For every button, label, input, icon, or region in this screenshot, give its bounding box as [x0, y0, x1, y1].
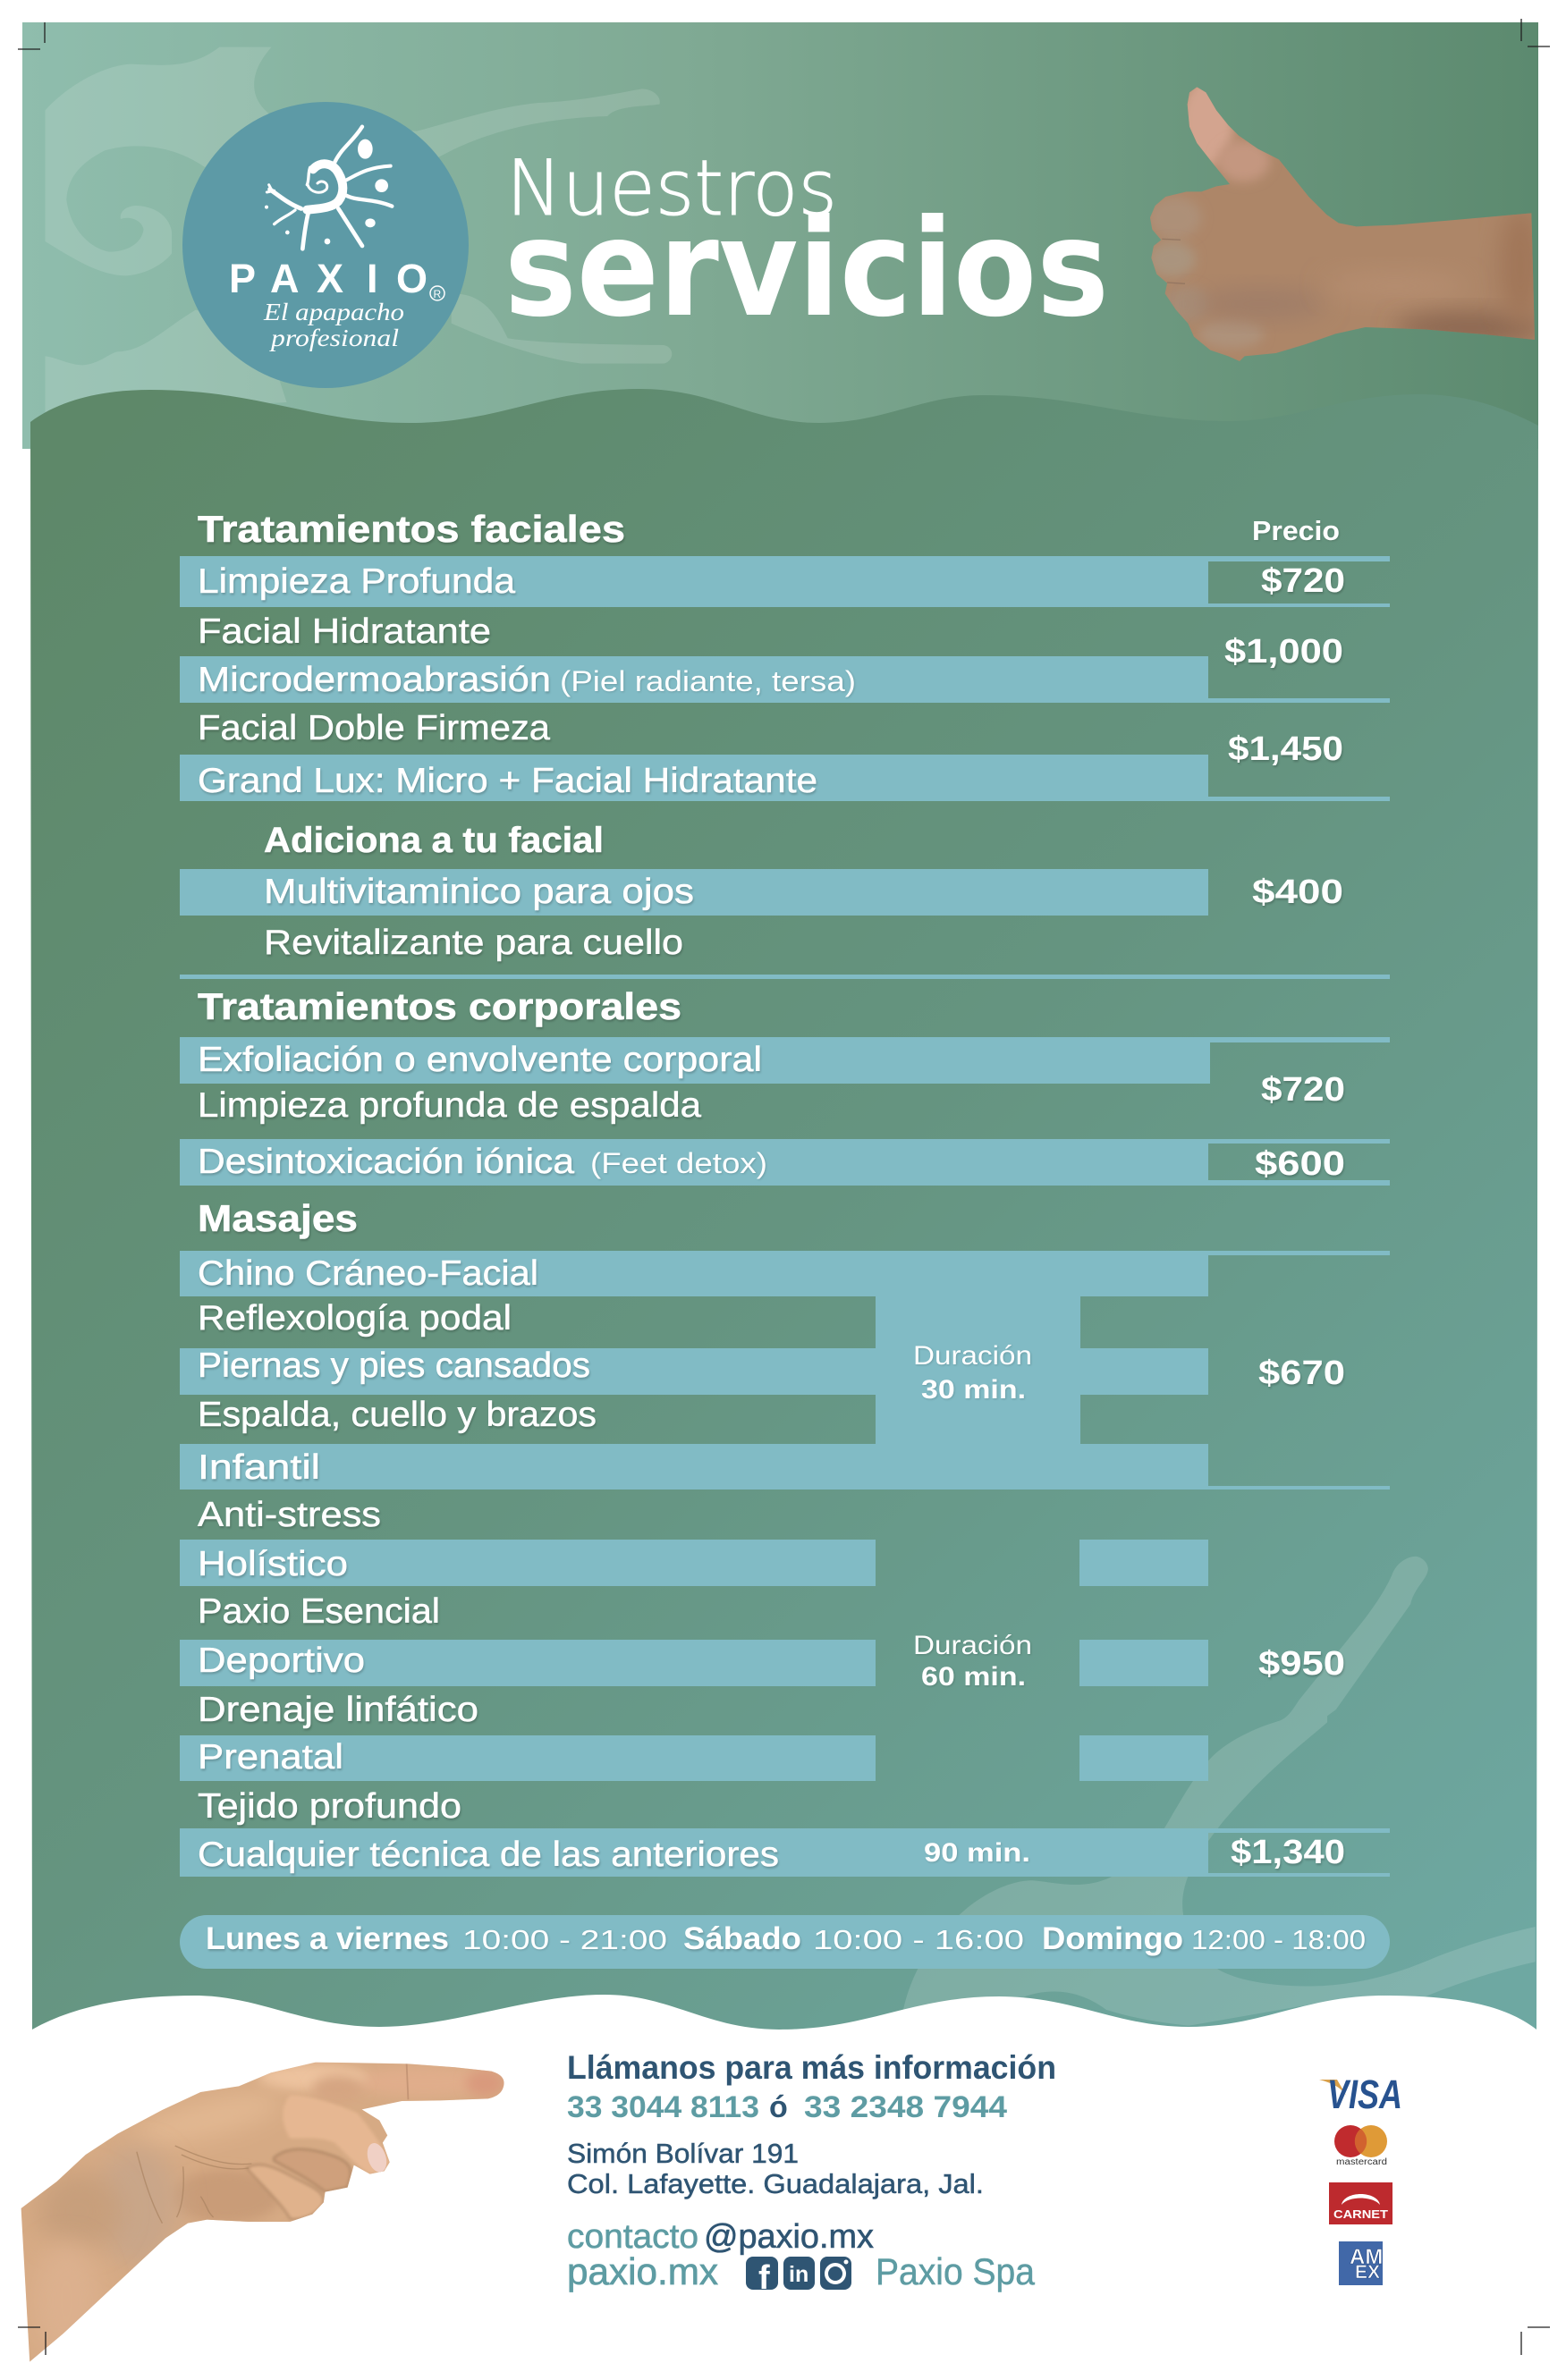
main green panel with wavy edges [30, 389, 1538, 2030]
row: multivitaminico: Multivitaminico para ojos [264, 873, 694, 911]
phone numbers [567, 2090, 1007, 2124]
heading: tratamientos faciales: Tratamientos faciales [198, 508, 625, 550]
row: revitalizante: Revitalizante para cuello [264, 924, 683, 962]
contact information [567, 2049, 1056, 2297]
opening hours pill [180, 1915, 1390, 1969]
tagline: profesional [269, 325, 399, 351]
bars: 30 minute massages: Piernas y pies cansados [198, 1346, 590, 1385]
icon: linkedin: in [789, 2262, 808, 2287]
row: facial hidratante: Facial Hidratante [198, 612, 491, 651]
row: microdermoabrasion: (Piel radiante, tersa) [560, 665, 856, 697]
row: desintoxicacion ionica: (Feet detox) [590, 1147, 767, 1179]
tagline [263, 299, 404, 351]
bars: 60 minute massages: Drenaje linfático [198, 1691, 478, 1729]
row: cualquier tecnica: $1,340 [1231, 1834, 1345, 1871]
address [567, 2138, 984, 2199]
logo: american express: AM [1350, 2245, 1383, 2269]
row: limpieza profunda [180, 556, 1390, 607]
bars: 60 minute massages: Prenatal [198, 1738, 343, 1777]
email: @paxio.mx [704, 2218, 874, 2256]
bars: 30 minute massages: Infantil [198, 1448, 320, 1487]
row: desintoxicacion ionica [180, 1139, 1390, 1186]
icon: thumbs up hand [1145, 78, 1545, 367]
opening hours pill: 12:00 - 18:00 [1191, 1924, 1366, 1955]
payment logos [1319, 2072, 1402, 2285]
heading: masajes: Masajes [198, 1197, 358, 1239]
heading: adiciona a tu facial: Adiciona a tu facial [264, 821, 604, 860]
price: 720: $720 [1261, 1071, 1345, 1109]
duration: 30 min: Duración [913, 1341, 1032, 1371]
tagline: El apapacho [263, 299, 404, 325]
address: Col. Lafayette. Guadalajara, Jal. [567, 2168, 984, 2199]
price: 400: $400 [1252, 874, 1343, 911]
icon: facebook [746, 2257, 778, 2297]
row: limpieza profunda de espalda: Limpieza profunda de espalda [198, 1086, 701, 1125]
logo: mastercard [1334, 2125, 1387, 2167]
row: grand lux [180, 755, 1390, 801]
bars: 60 minute massages: Tejido profundo [198, 1787, 461, 1826]
opening hours pill: 10:00 - 21:00 [462, 1924, 667, 1955]
bars: 30 minute massages: Reflexología podal [198, 1299, 512, 1338]
row: desintoxicacion ionica: $600 [1255, 1145, 1345, 1183]
duration: 30 min [913, 1341, 1032, 1405]
email: contacto [567, 2218, 698, 2256]
duration: 30 min: 30 min. [921, 1375, 1026, 1405]
address: Simón Bolívar 191 [567, 2138, 799, 2169]
logo: carnet: CARNET [1333, 2207, 1388, 2221]
icon: instagram [820, 2257, 851, 2290]
row: grand lux: Grand Lux: Micro + Facial Hidratante [198, 762, 817, 800]
bars: 60 minute massages: Paxio Esencial [198, 1592, 440, 1631]
email [567, 2218, 874, 2256]
row: exfoliacion: Exfoliación o envolvente corporal [198, 1041, 762, 1079]
opening hours pill: Sábado [683, 1921, 801, 1956]
duration: 60 min: Duración [913, 1631, 1032, 1660]
registered mark [430, 286, 444, 300]
icon: linkedin [783, 2257, 815, 2290]
icon: pointing hand [15, 2056, 507, 2367]
row: desintoxicacion ionica: Desintoxicación iónica [198, 1143, 574, 1181]
section: masajes [180, 1197, 1390, 1877]
title: Nuestros [506, 144, 837, 233]
row: microdermoabrasion: Microdermoabrasión [198, 661, 551, 699]
website: paxio.mx [567, 2250, 718, 2292]
title: servicios [504, 191, 1109, 347]
bars: 60 minute massages: Holístico [198, 1545, 348, 1583]
phone numbers: 33 3044 8113 [567, 2090, 759, 2124]
bars: 60 minute massages: Deportivo [198, 1642, 365, 1680]
duration: 60 min [913, 1631, 1032, 1692]
duration: 60 min: 60 min. [921, 1662, 1026, 1692]
row: facial doble firmeza: Facial Doble Firmeza [198, 709, 550, 747]
logo: carnet [1329, 2182, 1392, 2224]
row: exfoliacion [180, 1037, 1390, 1084]
decorative background figure in main panel [902, 1557, 1536, 2026]
price: 950: $950 [1258, 1645, 1345, 1683]
price: 670: $670 [1258, 1355, 1345, 1392]
opening hours pill: Domingo [1042, 1921, 1183, 1956]
row: cualquier tecnica [180, 1828, 1390, 1877]
icon: facebook: f [758, 2259, 770, 2297]
opening hours pill: Lunes a viernes [206, 1921, 449, 1956]
logo: visa: VISA [1327, 2072, 1402, 2117]
row: limpieza profunda: $720 [1261, 562, 1345, 600]
opening hours pill: 10:00 - 16:00 [813, 1924, 1024, 1955]
row: cualquier tecnica: Cualquier técnica de las anteriores [198, 1836, 779, 1874]
price header: Precio [1252, 515, 1340, 546]
section: tratamientos corporales [180, 985, 1390, 1186]
bars: 60 minute massages [180, 1496, 1208, 1826]
bars: 30 minute massages: Chino Cráneo-Facial [198, 1254, 538, 1293]
logo: mastercard: mastercard [1336, 2157, 1387, 2167]
section: tratamientos faciales [180, 508, 1390, 962]
row: limpieza profunda: Limpieza Profunda [198, 562, 515, 601]
bars: 30 minute massages: Espalda, cuello y brazos [198, 1396, 597, 1434]
icon: Paxio figure [265, 127, 392, 249]
row: cualquier tecnica: 90 min. [924, 1838, 1030, 1868]
row: multivitaminico [180, 869, 1208, 916]
logo: american express [1339, 2241, 1383, 2285]
contact heading: Llámanos para más información [567, 2049, 1056, 2086]
phone numbers: ó [769, 2090, 788, 2124]
price: 1,000: $1,000 [1224, 633, 1343, 671]
bars: 30 minute massages [180, 1251, 1390, 1490]
bars: 60 minute massages: Anti-stress [198, 1496, 381, 1534]
price: 1,450: $1,450 [1228, 730, 1343, 768]
brand name: PAXIO [229, 256, 427, 301]
social handle: Paxio Spa [876, 2250, 1036, 2292]
logo: american express: EX [1355, 2262, 1380, 2283]
logo: Paxio circle [182, 102, 469, 388]
phone numbers: 33 2348 7944 [804, 2090, 1007, 2124]
heading: tratamientos corporales: Tratamientos corporales [198, 985, 681, 1027]
registered mark: R [433, 288, 442, 300]
row: microdermoabrasion [180, 656, 1390, 703]
header background [22, 22, 1538, 449]
